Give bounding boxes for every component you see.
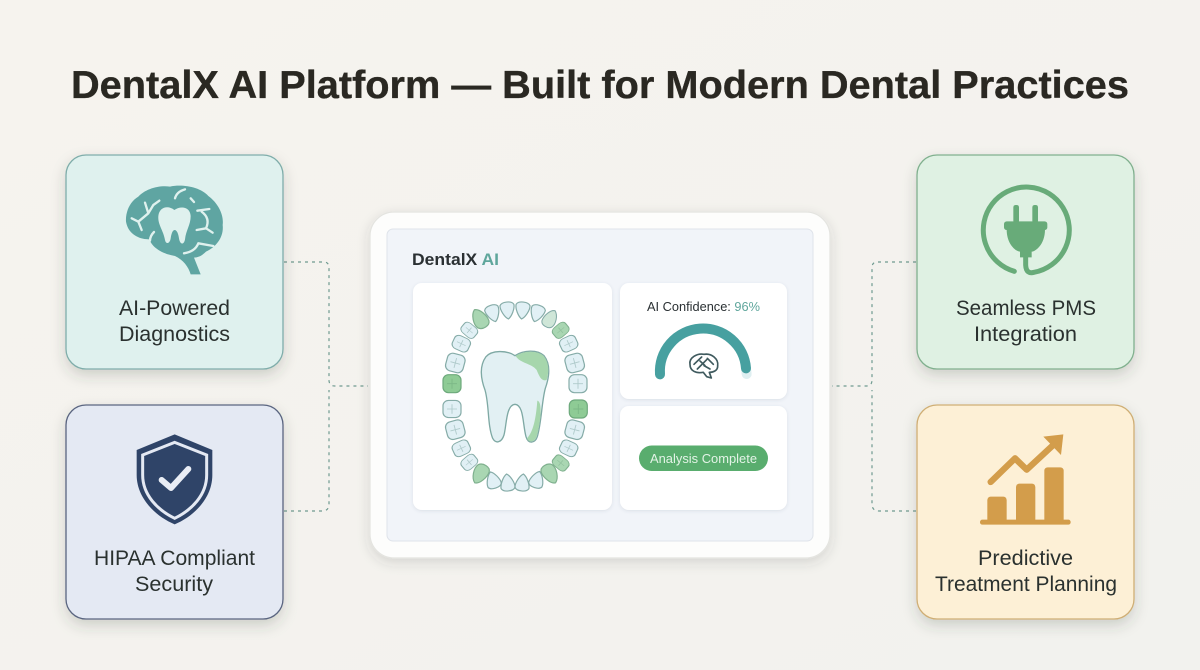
heading: DentalX AI: DentalX AI <box>412 250 499 269</box>
panel: dental arch <box>413 283 612 510</box>
icon: shield with check <box>137 434 212 524</box>
panel: AI-Powered Diagnostics <box>66 155 283 369</box>
label: AI-Powered Diagnostics: Diagnostics <box>119 323 230 346</box>
panel: tablet dashboard <box>370 212 830 558</box>
label: HIPAA Compliant Security: Security <box>135 573 214 596</box>
label: Predictive Treatment Planning: Predictive <box>978 547 1073 570</box>
chart: teeth arch <box>443 301 587 492</box>
badge: Analysis Complete <box>639 446 768 471</box>
panel: analysis status <box>620 406 787 510</box>
label: HIPAA Compliant Security: HIPAA Compliant <box>94 547 255 570</box>
panel: AI confidence gauge <box>620 283 787 399</box>
panel: Predictive Treatment Planning <box>917 405 1134 619</box>
icon: plug in circle <box>983 187 1069 273</box>
connector: left dotted lines <box>284 262 368 511</box>
chart: confidence gauge <box>660 329 747 378</box>
icon: growth chart <box>980 434 1071 525</box>
label: Seamless PMS Integration: Seamless PMS <box>956 297 1096 320</box>
icon: large tooth <box>481 351 549 442</box>
badge: Analysis Complete: Analysis Complete <box>650 452 757 466</box>
label: AI-Powered Diagnostics: AI-Powered <box>119 297 230 320</box>
icon: brain with tooth <box>126 186 223 274</box>
label: AI Confidence 96%: AI Confidence: 96% <box>647 300 760 314</box>
panel: Seamless PMS Integration <box>917 155 1134 369</box>
title: DentalX AI Platform — Built for Modern Dental Practices <box>71 64 1129 107</box>
connector: right dotted lines <box>832 262 916 511</box>
panel: HIPAA Compliant Security <box>66 405 283 619</box>
label: Seamless PMS Integration: Integration <box>974 323 1077 346</box>
label: Predictive Treatment Planning: Treatment Planning <box>935 573 1117 596</box>
icon: small brain <box>690 354 718 378</box>
